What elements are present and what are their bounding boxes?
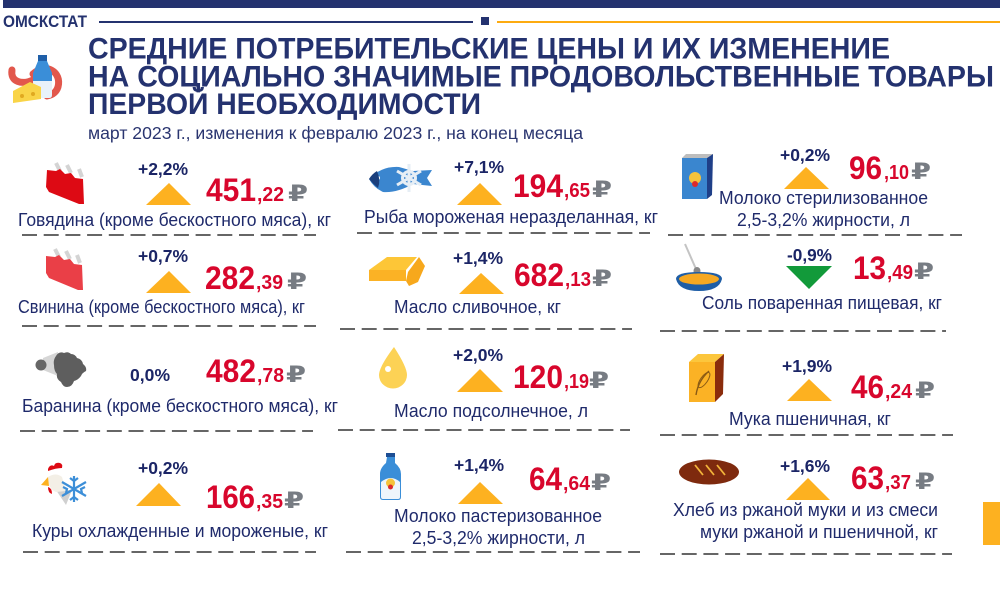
label: 2,5-3,2% жирности, л <box>737 209 910 230</box>
price: ₽ <box>915 379 935 404</box>
change: 0,0% <box>130 365 170 385</box>
price: ₽ <box>911 160 931 185</box>
subtitle: март 2023 г., изменения к февралю 2023 г., на конец месяца <box>88 123 583 143</box>
price <box>206 172 308 208</box>
triangle up <box>784 167 829 189</box>
item: butter <box>369 248 612 317</box>
price: ₽ <box>591 471 611 496</box>
label: Соль поваренная пищевая, кг <box>702 292 942 313</box>
price: ₽ <box>284 489 304 514</box>
icon: beef <box>46 163 84 204</box>
change: +2,0% <box>453 345 503 365</box>
triangle up <box>458 482 503 504</box>
icon: mutton <box>36 352 86 387</box>
price <box>851 369 935 405</box>
label: Куры охлажденные и мороженые, кг <box>32 520 328 541</box>
price: ₽ <box>286 363 306 388</box>
change: +0,2% <box>780 145 830 165</box>
price <box>851 460 935 496</box>
price: ₽ <box>288 182 308 207</box>
icon: butter <box>369 257 425 286</box>
triangle up <box>459 273 504 294</box>
price: ,39 <box>256 272 283 294</box>
price: 194 <box>513 168 563 204</box>
change: +0,7% <box>138 246 188 266</box>
price <box>206 479 304 515</box>
item: beef <box>18 159 331 230</box>
icon: milk bottle <box>380 453 401 500</box>
change: +1,4% <box>453 248 503 268</box>
change: +2,2% <box>138 159 188 179</box>
item: sterilized milk <box>682 145 931 230</box>
label: Молоко стерилизованное <box>719 187 928 208</box>
price: ,64 <box>563 473 591 495</box>
price: 482 <box>206 353 256 389</box>
title: СРЕДНИЕ ПОТРЕБИТЕЛЬСКИЕ ЦЕНЫ И ИХ ИЗМЕНЕНИЕ <box>88 32 890 66</box>
price: ,78 <box>257 365 284 387</box>
label: Мука пшеничная, кг <box>729 408 891 429</box>
label: муки ржаной и пшеничной, кг <box>700 521 938 542</box>
label <box>719 187 928 230</box>
triangle up <box>787 379 832 401</box>
icon: bread loaf <box>679 460 739 484</box>
price <box>849 150 931 186</box>
title: ПЕРВОЙ НЕОБХОДИМОСТИ <box>88 87 481 121</box>
title <box>88 32 994 121</box>
label: Говядина (кроме бескостного мяса), кг <box>18 209 331 230</box>
top bar <box>3 0 1000 8</box>
label: Баранина (кроме бескостного мяса), кг <box>22 395 338 416</box>
item: pasteurized milk <box>380 453 611 548</box>
label: Свинина (кроме бескостного мяса), кг <box>18 296 305 317</box>
page tab <box>983 502 1000 545</box>
price: 63 <box>851 460 884 496</box>
price: 166 <box>206 479 255 515</box>
item: chicken <box>32 458 328 541</box>
triangle up <box>136 483 181 506</box>
change: +1,9% <box>782 356 832 376</box>
price: ,10 <box>884 162 909 184</box>
price <box>514 257 612 293</box>
price: 64 <box>529 461 562 497</box>
item: salt <box>676 244 942 313</box>
item: pork <box>18 246 307 317</box>
icon: chicken <box>41 463 86 505</box>
price: 46 <box>851 369 884 405</box>
price: 96 <box>849 150 882 186</box>
price: ,13 <box>565 269 591 291</box>
price: ₽ <box>914 260 934 285</box>
price: 120 <box>513 359 563 395</box>
price: 451 <box>206 172 256 208</box>
price: ,24 <box>885 381 913 403</box>
label: 2,5-3,2% жирности, л <box>412 527 585 548</box>
triangle up <box>146 271 191 293</box>
icon: milk carton <box>682 154 713 199</box>
price: ,22 <box>257 184 284 206</box>
triangle up <box>146 183 191 205</box>
triangle up <box>457 369 503 392</box>
icon: oil drop <box>379 347 407 388</box>
price <box>513 359 609 395</box>
price: ₽ <box>592 267 612 292</box>
price: 682 <box>514 257 564 293</box>
item: flour <box>689 354 935 429</box>
change: -0,9% <box>787 245 832 265</box>
price <box>853 250 934 286</box>
price: ₽ <box>287 270 307 295</box>
brand: Омскстат: ОМСКСТАТ <box>3 13 87 31</box>
label <box>673 499 938 542</box>
label: Масло подсолнечное, л <box>394 400 588 421</box>
price <box>206 353 306 389</box>
item: fish <box>364 157 658 227</box>
price: ,37 <box>885 472 911 494</box>
item: rye bread <box>673 456 938 542</box>
icon: bowl of soup <box>676 244 722 291</box>
label: Молоко пастеризованное <box>394 505 602 526</box>
change: +1,4% <box>454 455 504 475</box>
label: Масло сливочное, кг <box>394 296 561 317</box>
price: 282 <box>205 260 255 296</box>
price: 13 <box>853 250 886 286</box>
price: ,35 <box>256 491 283 513</box>
change: +0,2% <box>138 458 188 478</box>
triangle up <box>786 478 830 500</box>
price: ₽ <box>592 178 612 203</box>
icon: flour bag <box>689 354 724 402</box>
label: Рыба мороженая неразделанная, кг <box>364 206 658 227</box>
price: ,65 <box>564 180 590 202</box>
icon: fish <box>369 164 432 192</box>
price <box>513 168 612 204</box>
price: ₽ <box>589 369 609 394</box>
price: ,19 <box>564 371 589 393</box>
change: +1,6% <box>780 456 830 476</box>
triangle up <box>457 183 502 205</box>
triangle down <box>786 266 832 289</box>
price <box>205 260 307 296</box>
change: +7,1% <box>454 157 504 177</box>
icon: food group <box>12 55 59 103</box>
item: sunflower oil <box>379 345 609 421</box>
icon: pork <box>46 249 83 290</box>
price <box>529 461 611 497</box>
label <box>394 505 602 548</box>
price: ₽ <box>915 470 935 495</box>
item: mutton <box>22 352 338 416</box>
price: ,49 <box>887 262 913 284</box>
label: Хлеб из ржаной муки и из смеси <box>673 499 938 520</box>
header rule <box>99 17 1000 25</box>
